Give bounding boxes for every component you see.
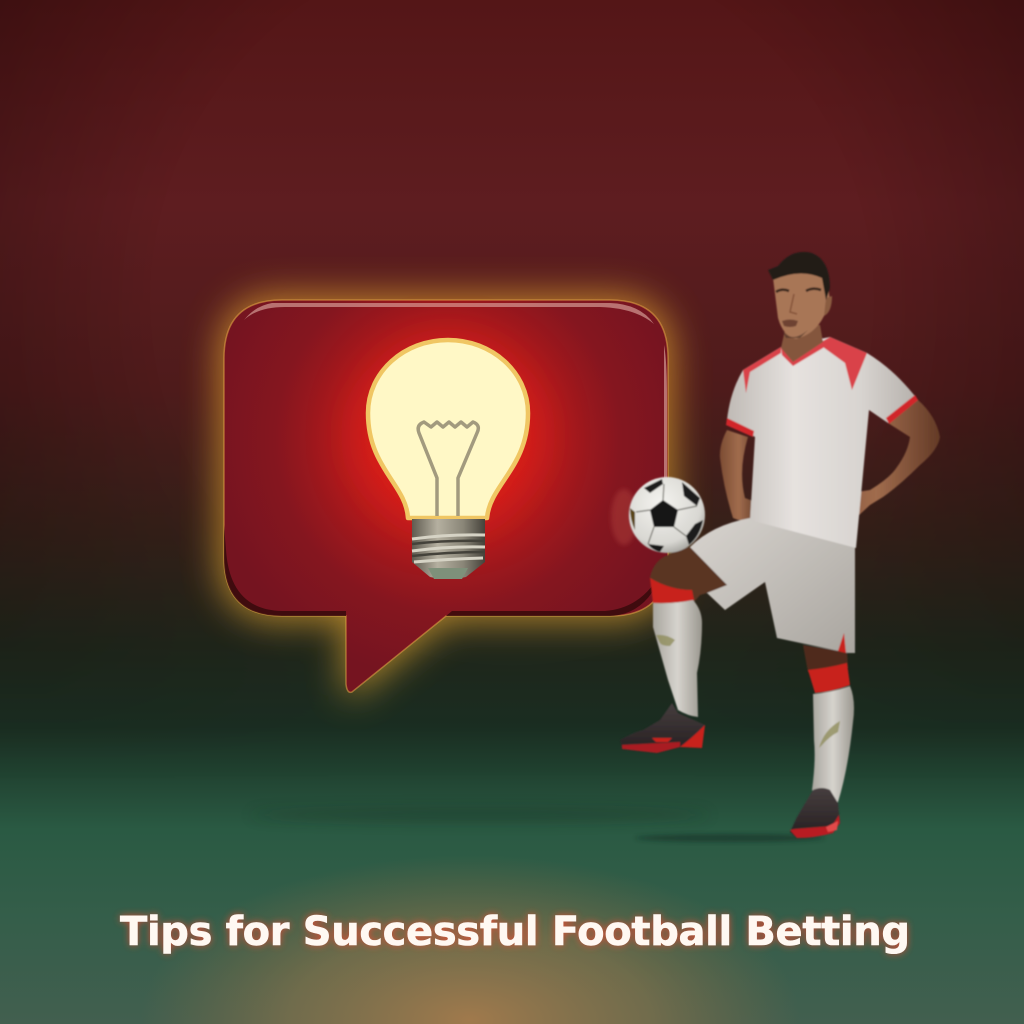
bubble lower shade: [224, 525, 664, 616]
neck and head: [768, 252, 832, 362]
bubble highlight: [244, 303, 667, 540]
football: [611, 477, 705, 553]
title: Tips for Successful Football Betting: [120, 909, 910, 955]
bubble glow: [219, 295, 673, 697]
bubble body: [224, 300, 668, 692]
title: Tips for Successful Football Betting: [120, 909, 910, 955]
icon: lightbulb: [356, 340, 540, 579]
standing leg: [790, 645, 854, 838]
boot: standing: [790, 788, 840, 838]
raised leg: [620, 547, 727, 753]
shorts: [690, 518, 855, 653]
arms: [720, 400, 940, 530]
football player: [611, 252, 940, 838]
speech bubble with lightbulb: [219, 295, 673, 697]
bulb screw base: [412, 519, 485, 579]
jersey: [726, 337, 918, 548]
boot: raised: [620, 703, 705, 753]
